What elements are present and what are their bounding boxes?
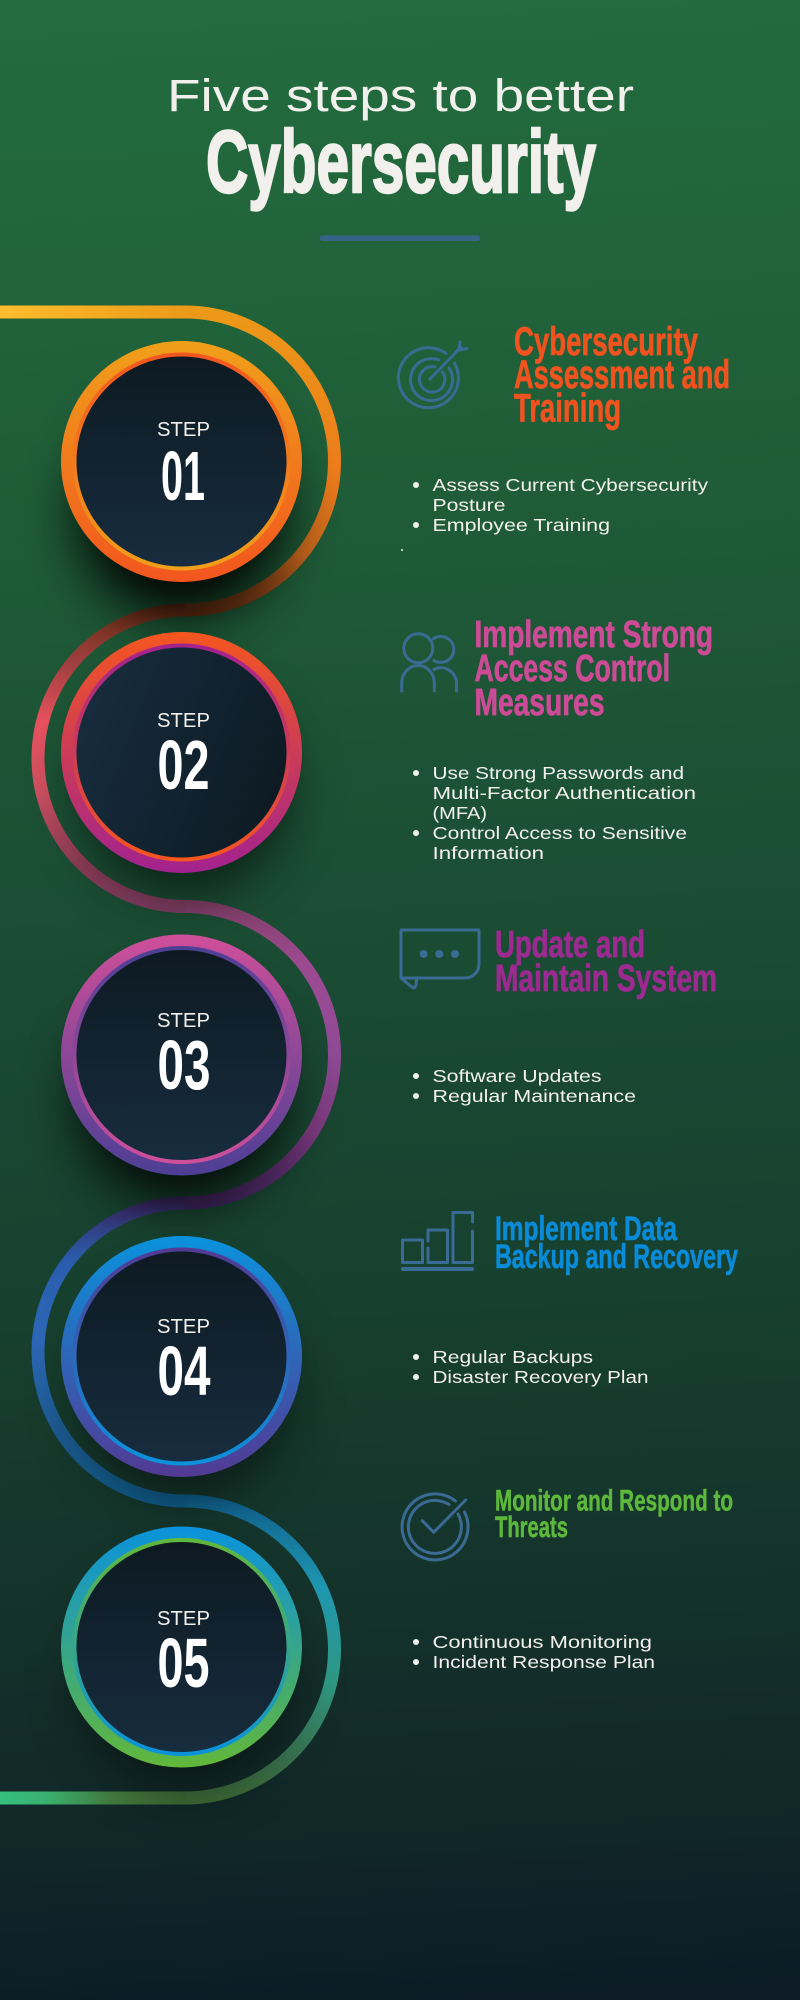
bullet list: Control Access to Sensitive — [432, 823, 687, 843]
heading — [495, 1210, 738, 1276]
bullet list: Use Strong Passwords and — [432, 763, 684, 783]
step 01 badge: STEP — [157, 419, 210, 441]
icon: target with arrow — [398, 342, 467, 408]
bullet list: Assess Current Cybersecurity — [432, 475, 708, 495]
bullet list: Regular Backups — [432, 1347, 593, 1367]
heading: Update and — [495, 924, 645, 966]
heading — [495, 1484, 733, 1544]
step 01 badge: 01 — [161, 437, 205, 515]
bullet list: Employee Training — [432, 515, 610, 535]
step 04 badge: STEP — [157, 1316, 210, 1338]
heading — [495, 924, 717, 1000]
panel: step 2 access control — [402, 614, 713, 863]
step 01 badge — [61, 341, 302, 616]
step 05 badge: 05 — [158, 1624, 210, 1702]
heading — [474, 614, 713, 724]
step 02 badge: 02 — [158, 726, 210, 804]
bullet list: Posture — [432, 495, 506, 515]
icon: speech bubble — [401, 930, 479, 988]
icon: two people — [402, 634, 456, 691]
step 04 badge: 04 — [158, 1332, 211, 1410]
bullet list — [413, 475, 708, 535]
bullet list — [413, 763, 696, 863]
step 03 badge: STEP — [157, 1010, 210, 1032]
heading: Measures — [474, 682, 604, 724]
icon: bar chart — [402, 1212, 472, 1269]
bullet list: Software Updates — [432, 1066, 602, 1086]
heading — [514, 320, 730, 430]
heading: Cybersecurity — [514, 320, 699, 364]
icon: check mark in circle — [402, 1494, 468, 1560]
title — [167, 70, 634, 211]
heading: Access Control — [474, 648, 670, 690]
heading: Implement Strong — [474, 614, 713, 656]
step 03 badge: 03 — [158, 1026, 210, 1104]
heading: Threats — [495, 1511, 568, 1544]
title line: Cybersecurity: Cybersecurity — [206, 112, 596, 211]
bullet list: Continuous Monitoring — [432, 1632, 652, 1652]
divider — [320, 236, 480, 241]
stray dot — [401, 549, 403, 551]
heading: Maintain System — [495, 958, 717, 1000]
bullet list: Incident Response Plan — [432, 1652, 655, 1672]
step 02 badge: STEP — [157, 710, 210, 732]
step 04 badge — [61, 1236, 302, 1496]
panel: step 5 monitor and respond — [402, 1484, 733, 1672]
step 05 badge — [61, 1526, 302, 1786]
bullet list: Multi-Factor Authentication — [432, 783, 696, 803]
bullet list: (MFA) — [432, 803, 487, 823]
bullet list: Information — [432, 843, 544, 863]
step 02 badge — [61, 632, 302, 894]
bullet list — [413, 1347, 648, 1387]
bullet list — [413, 1066, 636, 1106]
heading: Training — [514, 386, 621, 430]
step 03 badge — [61, 934, 302, 1202]
bullet list: Regular Maintenance — [432, 1086, 636, 1106]
bullet list: Disaster Recovery Plan — [432, 1367, 648, 1387]
panel: step 3 update and maintain — [401, 924, 717, 1106]
heading: Implement Data — [495, 1210, 678, 1248]
title line: Five steps to better: Five steps to better — [167, 70, 634, 121]
bullet list — [413, 1632, 655, 1672]
winding ribbon path — [0, 312, 334, 1798]
panel: step 4 data backup — [402, 1210, 738, 1387]
step 05 badge: STEP — [157, 1608, 210, 1630]
panel: step 1 assessment and training — [398, 320, 730, 535]
